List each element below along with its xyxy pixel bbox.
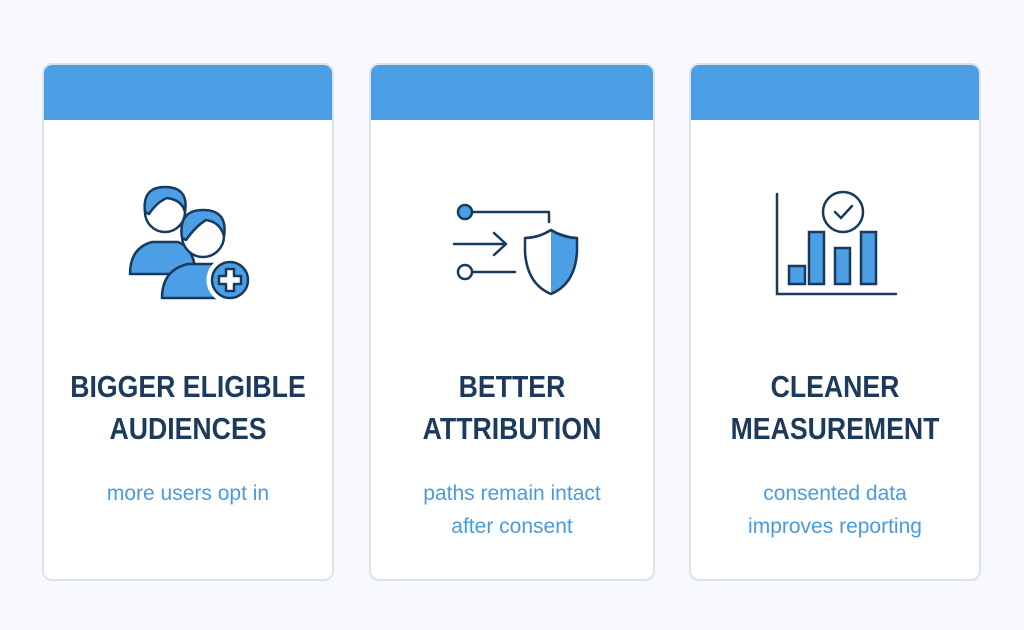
panel: bigger eligible audiences xyxy=(42,63,334,581)
heading: MEASUREMENT xyxy=(731,411,939,446)
text block xyxy=(423,482,601,538)
icon: users plus xyxy=(128,186,250,300)
text block: improves reporting xyxy=(748,515,922,538)
text block: after consent xyxy=(451,515,573,538)
text block: consented data xyxy=(763,482,907,505)
icon: paths and shield xyxy=(452,204,578,296)
text block: more users opt in xyxy=(107,482,269,505)
heading: AUDIENCES xyxy=(109,411,267,446)
heading: BETTER xyxy=(459,369,565,404)
heading xyxy=(70,369,306,446)
text block xyxy=(748,482,922,538)
panel: better attribution xyxy=(369,63,655,581)
heading: ATTRIBUTION xyxy=(423,411,601,446)
heading: BIGGER ELIGIBLE xyxy=(70,369,306,404)
panel: cleaner measurement xyxy=(689,63,981,581)
icon: bar chart with check xyxy=(776,190,898,296)
heading: CLEANER xyxy=(771,369,899,404)
heading xyxy=(731,369,940,446)
heading xyxy=(423,369,601,446)
text block: paths remain intact xyxy=(423,482,601,505)
